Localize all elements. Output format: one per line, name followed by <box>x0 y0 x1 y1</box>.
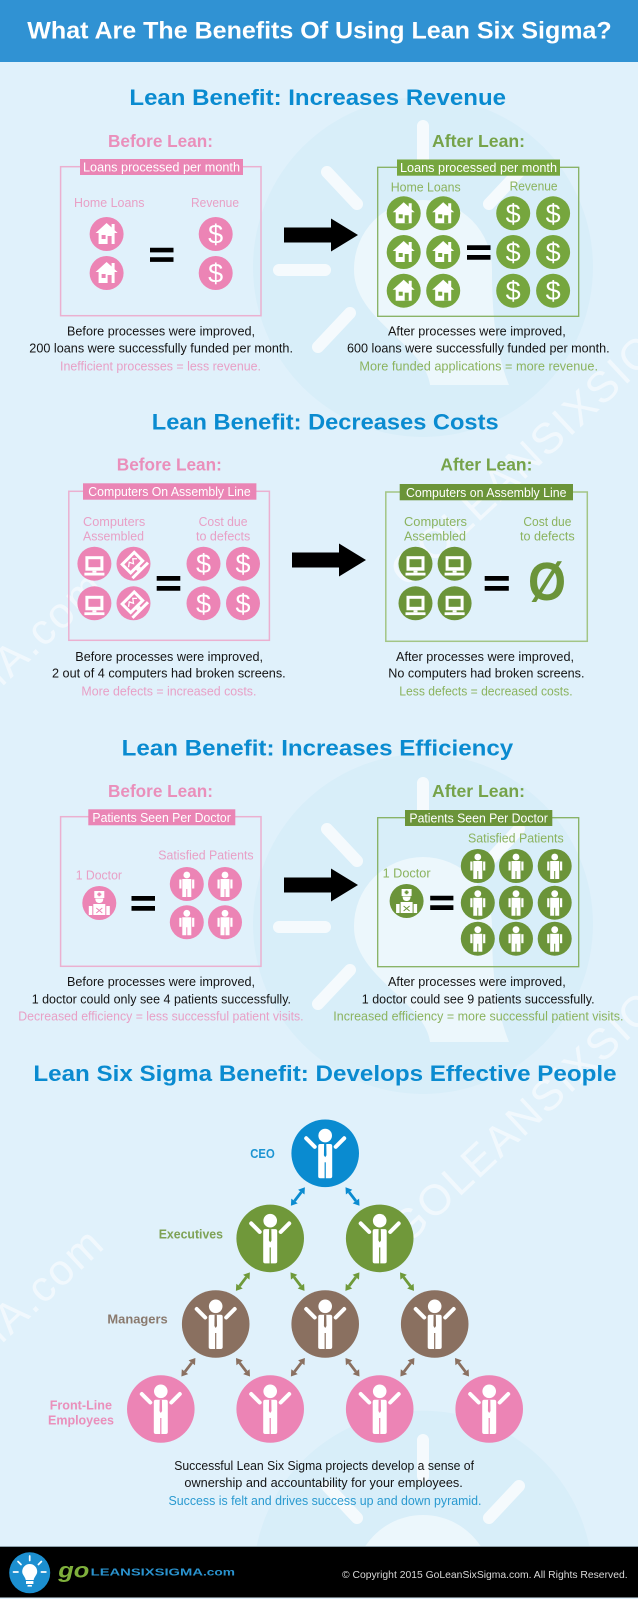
text: after efficiency <box>333 974 624 1024</box>
panel: before lean efficiency: Satisfied Patients <box>158 849 254 863</box>
text: before costs: 2 out of 4 computers had broken screens. <box>52 666 286 681</box>
panel: after lean revenue: Revenue <box>510 180 558 194</box>
text: before costs: Before processes were improved, <box>75 649 263 664</box>
text: after revenue: 600 loans were successfully funded per month. <box>347 341 610 356</box>
text: before efficiency: Before processes were improved, <box>67 974 255 989</box>
text: before costs <box>52 649 286 699</box>
panel: after lean revenue <box>378 131 579 316</box>
section: decreases costs <box>52 409 587 699</box>
panel: before lean costs: Before Lean: <box>117 455 222 475</box>
text: after costs: Less defects = decreased costs. <box>399 684 573 699</box>
text: after revenue <box>347 324 610 374</box>
copyright: © Copyright 2015 GoLeanSixSigma.com. All Rights Reserved. <box>342 1569 628 1581</box>
arrow: efficiency <box>284 868 358 902</box>
text: after efficiency: Increased efficiency = more successful patient visits. <box>333 1009 624 1024</box>
panel: after lean revenue: $ <box>546 238 561 268</box>
text: after costs: After processes were improved, <box>396 649 574 664</box>
footer <box>0 1546 638 1598</box>
text: after costs <box>388 649 584 699</box>
text: before revenue <box>29 324 293 374</box>
logo wordmark <box>57 1560 235 1582</box>
panel: after lean revenue: $ <box>506 238 521 268</box>
panel: before lean revenue <box>61 131 261 316</box>
panel: after lean revenue: Home Loans <box>391 181 461 195</box>
logo wordmark: LEANSIXSIGMA <box>91 1568 203 1579</box>
panel: after lean costs: Cost due <box>523 515 571 529</box>
panel: after lean costs: Assembled <box>404 530 466 544</box>
heading: develops effective people: Lean Six Sigma Benefit: Develops Effective People <box>33 1061 617 1086</box>
heading: increases efficiency: Lean Benefit: Increases Efficiency <box>122 735 514 760</box>
panel: after lean revenue: After Lean: <box>432 131 525 151</box>
panel: before lean revenue: $ <box>208 220 223 250</box>
arrow: costs <box>292 544 366 576</box>
label: executives: Executives <box>159 1226 223 1241</box>
panel: before lean costs <box>69 455 269 640</box>
label: CEO: CEO <box>250 1146 275 1161</box>
section: increases revenue <box>29 85 610 374</box>
panel: after lean revenue: $ <box>546 276 561 306</box>
text: before revenue: 200 loans were successfully funded per month. <box>29 341 293 356</box>
panel: before lean costs: $ <box>196 549 211 579</box>
logo wordmark: .com <box>203 1568 235 1579</box>
text: before revenue: Inefficient processes = less revenue. <box>60 359 261 374</box>
panel: after lean revenue: $ <box>506 276 521 306</box>
row: executives <box>236 1205 414 1272</box>
panel: after lean costs <box>386 455 587 641</box>
panel: before lean efficiency: Patients Seen Per Doctor <box>92 811 231 825</box>
icon: logo lightbulb <box>9 1552 50 1593</box>
text: before revenue: Before processes were improved, <box>67 324 255 339</box>
logo wordmark: go <box>57 1560 90 1582</box>
text: pyramid summary: Successful Lean Six Sigma projects develop a sense of <box>174 1458 474 1473</box>
panel: before lean costs: $ <box>235 549 251 579</box>
panel: after lean costs: After Lean: <box>440 455 532 475</box>
text: before efficiency <box>18 974 304 1024</box>
section: develops effective people <box>33 1061 617 1508</box>
text: before costs: More defects = increased costs. <box>81 684 256 699</box>
panel: after lean costs: Computers <box>404 515 467 529</box>
text: before efficiency: Decreased efficiency = less successful patient visits. <box>18 1009 304 1024</box>
heading: increases revenue: Lean Benefit: Increases Revenue <box>129 85 506 110</box>
text: before efficiency: 1 doctor could only see 4 patients successfully. <box>32 992 291 1007</box>
panel: before lean revenue: $ <box>208 258 223 288</box>
label: managers: Managers <box>107 1312 168 1327</box>
panel: after lean revenue: Loans processed per month <box>400 161 557 175</box>
panel: after lean efficiency: Patients Seen Per Doctor <box>409 812 548 826</box>
text: pyramid summary <box>168 1458 482 1508</box>
panel: before lean efficiency: 1 Doctor <box>76 869 122 883</box>
label: front-line employees: Front-Line <box>50 1398 112 1413</box>
text: after costs: No computers had broken screens. <box>388 666 584 681</box>
text: after efficiency: After processes were improved, <box>388 974 566 989</box>
panel: before lean costs: Assembled <box>83 530 144 544</box>
panel: after lean costs: to defects <box>520 530 575 544</box>
row: managers <box>182 1290 469 1358</box>
row: front-line employees <box>127 1375 523 1443</box>
heading: decreases costs: Lean Benefit: Decreases Costs <box>152 409 499 434</box>
panel: before lean efficiency <box>61 781 261 966</box>
icon: CEO <box>291 1120 359 1187</box>
text: after revenue: More funded applications = more revenue. <box>359 359 598 374</box>
pyramid arrows <box>181 1187 469 1376</box>
panel: before lean revenue: Revenue <box>191 196 239 210</box>
text: pyramid summary: ownership and accountability for your employees. <box>184 1475 463 1490</box>
text: after revenue: After processes were improved, <box>388 324 566 339</box>
panel: before lean revenue: Before Lean: <box>108 131 213 151</box>
panel: after lean costs: Computers on Assembly Line <box>406 486 567 500</box>
panel: before lean efficiency: Before Lean: <box>108 781 213 801</box>
panel: before lean revenue: Home Loans <box>74 196 144 210</box>
panel: before lean costs: $ <box>235 589 251 619</box>
arrow: revenue <box>284 218 358 252</box>
panel: after lean efficiency <box>378 781 579 967</box>
panel: before lean costs: to defects <box>196 530 250 544</box>
section: increases efficiency <box>18 735 624 1024</box>
panel: before lean costs: $ <box>196 589 211 619</box>
title banner <box>0 0 638 62</box>
panel: after lean revenue: $ <box>506 199 521 229</box>
label: front-line employees <box>48 1398 114 1428</box>
panel: before lean costs: Computers <box>83 515 145 529</box>
panel: after lean efficiency: After Lean: <box>432 781 525 801</box>
label: front-line employees: Employees <box>48 1413 114 1428</box>
panel: after lean efficiency: Satisfied Patients <box>468 832 564 846</box>
text: pyramid summary: Success is felt and drives success up and down pyramid. <box>168 1493 482 1508</box>
title banner: What Are The Benefits Of Using Lean Six Sigma? <box>27 18 612 44</box>
panel: before lean revenue: Loans processed per month <box>83 160 240 174</box>
panel: after lean costs: Ø <box>528 552 566 612</box>
panel: before lean costs: Computers On Assembly Line <box>88 485 251 499</box>
panel: after lean efficiency: 1 Doctor <box>383 867 431 881</box>
panel: after lean revenue: $ <box>546 199 561 229</box>
panel: before lean costs: Cost due <box>199 515 248 529</box>
text: after efficiency: 1 doctor could see 9 patients successfully. <box>362 992 595 1007</box>
